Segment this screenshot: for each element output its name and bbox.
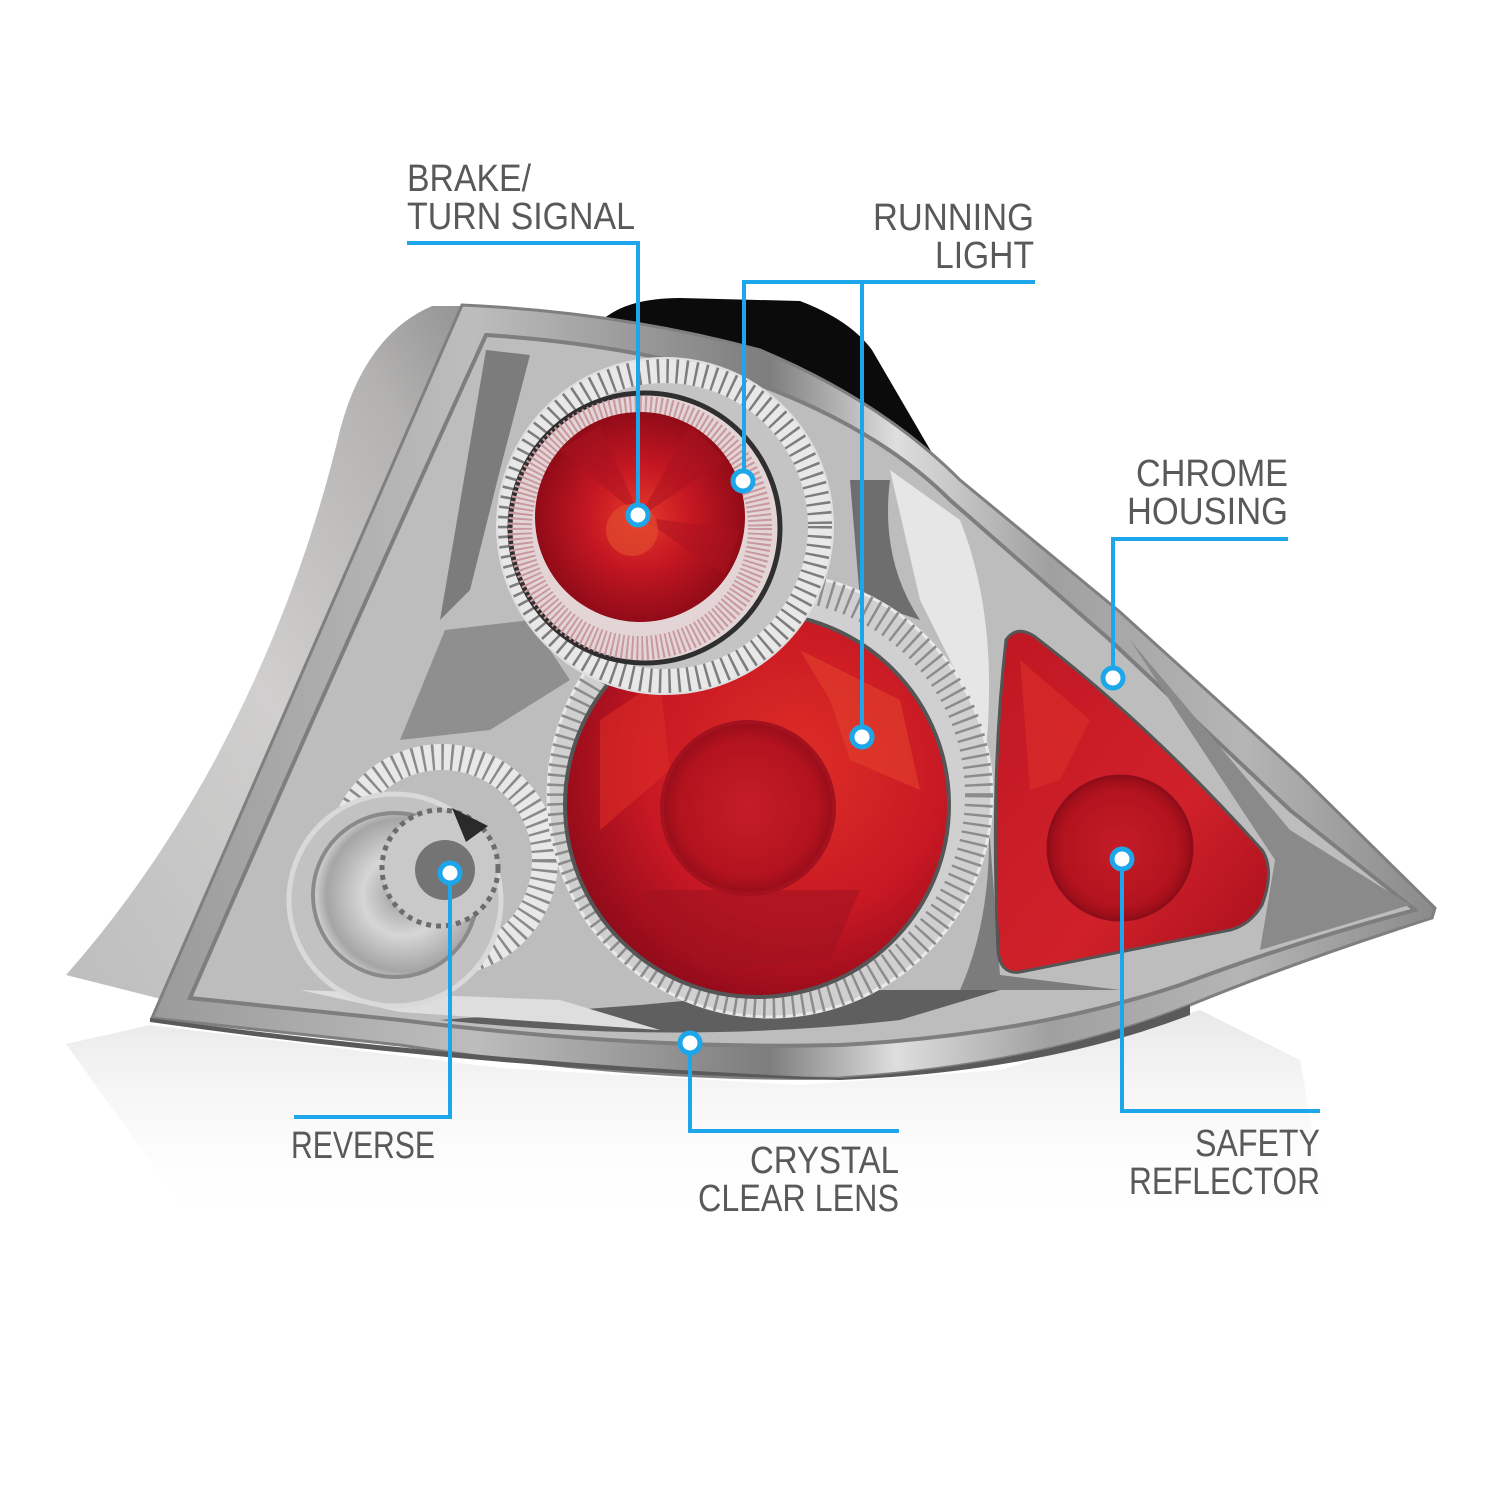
leader line [294, 873, 450, 1117]
brake dark bezel [510, 393, 780, 663]
label: chrome housing: CHROME [1136, 453, 1288, 495]
marker [1103, 668, 1123, 688]
callout: brake and turn signal [407, 158, 648, 525]
label: brake turn signal: BRAKE/ [407, 158, 531, 200]
label: reverse: REVERSE [291, 1125, 435, 1167]
leader line [690, 1043, 899, 1131]
chrome housing [152, 305, 1435, 1078]
label: chrome housing: HOUSING [1127, 491, 1288, 533]
label: crystal clear lens: CLEAR LENS [698, 1178, 899, 1220]
main reflector [662, 722, 834, 894]
triangular red lens [995, 631, 1268, 972]
leader line [1113, 539, 1288, 678]
marker lower [852, 727, 872, 747]
tail light assembly [66, 298, 1435, 1080]
marker [440, 863, 460, 883]
leader line [407, 243, 638, 515]
main red lens [565, 613, 949, 997]
safety reflector triangle [995, 631, 1268, 972]
leader lines [744, 282, 1035, 737]
reverse lamp [289, 757, 545, 1006]
triangular reflector disc [1048, 776, 1192, 920]
callout: running light [733, 197, 1035, 747]
label: crystal clear lens: CRYSTAL [750, 1140, 899, 1182]
marker [1112, 849, 1132, 869]
housing inner frame [190, 335, 1415, 1046]
main ribbed ring [548, 573, 992, 1017]
marker [680, 1033, 700, 1053]
brake and turn signal lamp [497, 358, 833, 694]
reverse ribbed ring [339, 757, 545, 963]
leader line [1122, 859, 1320, 1111]
marker upper [733, 471, 753, 491]
callout: reverse [291, 863, 460, 1167]
label: running light: LIGHT [935, 235, 1034, 277]
floor reflection [66, 1010, 1330, 1230]
label: brake turn signal: TURN SIGNAL [407, 196, 635, 238]
brake ribbed ring [497, 358, 833, 694]
callout: chrome housing [1103, 453, 1288, 688]
main round lamp [548, 573, 992, 1017]
label: safety reflector: SAFETY [1195, 1123, 1320, 1165]
marker [628, 505, 648, 525]
label: running light: RUNNING [873, 197, 1034, 239]
label: safety reflector: REFLECTOR [1129, 1161, 1320, 1203]
dark reflections [440, 350, 530, 620]
callout: safety reflector [1112, 849, 1320, 1203]
reverse clear lens [289, 794, 501, 1006]
silver mounting flange [66, 306, 500, 1000]
black rear gasket [600, 298, 942, 470]
brake red lens [535, 412, 745, 622]
brake halo ring [520, 408, 760, 648]
callout: crystal clear lens [680, 1033, 899, 1220]
